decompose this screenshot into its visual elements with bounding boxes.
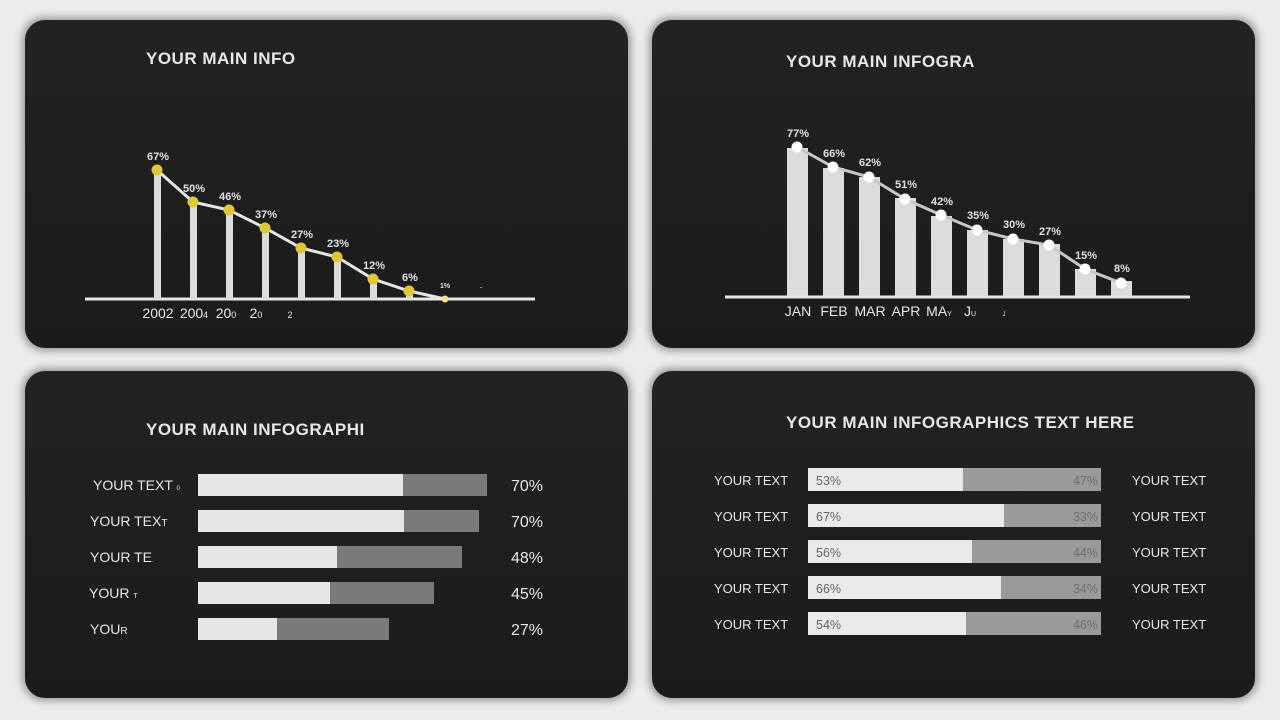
stem chart: 2004 (180, 305, 208, 321)
bar chart: J (1002, 312, 1006, 318)
split bars: 34% (1073, 582, 1098, 596)
stem chart: 2 (287, 310, 293, 320)
title: YOUR MAIN INFOGRAPHICS TEXT HERE (786, 413, 1134, 432)
bars: YOUR TE. (90, 549, 154, 565)
bars: YOUR TEXT (90, 513, 167, 529)
split bars: YOUR TEXT (1132, 473, 1206, 488)
split bars: YOUR TEXT (1132, 617, 1206, 632)
stem chart: 1% (440, 283, 451, 290)
bar chart: 66% (823, 148, 845, 160)
bar chart: FEB (820, 303, 848, 319)
split bars: 53% (816, 474, 841, 488)
bars: 27% (511, 622, 543, 639)
stem chart (85, 151, 535, 321)
bar chart: 77% (787, 128, 809, 140)
stem chart: 67% (147, 151, 169, 163)
split bars: YOUR TEXT (714, 545, 788, 560)
bar chart: 62% (859, 157, 881, 169)
bars: YOUR (90, 621, 128, 637)
bars (89, 474, 543, 640)
stem chart: 6% (402, 272, 418, 284)
panel: bottom-left horizontal bars (25, 371, 628, 698)
bar chart: APR (892, 303, 920, 319)
bars: 70% (511, 478, 543, 495)
split bars: YOUR TEXT (714, 509, 788, 524)
title: YOUR MAIN INFO (146, 49, 296, 68)
split bars: 44% (1073, 546, 1098, 560)
stem chart: 46% (219, 191, 241, 203)
split bars: YOUR TEXT (1132, 545, 1206, 560)
stem chart: 20 (250, 305, 262, 321)
bar chart: 30% (1003, 219, 1025, 231)
bar chart: 35% (967, 210, 989, 222)
bars: 70% (511, 514, 543, 531)
title: YOUR MAIN INFOGRAPHI (146, 420, 365, 439)
split bars: 33% (1073, 510, 1098, 524)
split bars: 56% (816, 546, 841, 560)
bar chart (725, 128, 1190, 319)
split bars: 54% (816, 618, 841, 632)
panel: top-left line stem chart (25, 20, 628, 348)
bars: YOUR T (89, 585, 138, 601)
bars: 48% (511, 550, 543, 567)
panel: bottom-right split bars (652, 371, 1255, 698)
bars: YOUR TEXT 0 (93, 477, 181, 493)
split bars: 66% (816, 582, 841, 596)
split bars: YOUR TEXT (1132, 581, 1206, 596)
stem chart: .. (480, 284, 483, 290)
bar chart: 8% (1114, 263, 1130, 275)
stem chart: 50% (183, 183, 205, 195)
split bars: YOUR TEXT (714, 473, 788, 488)
bars: 45% (511, 586, 543, 603)
stem chart: 12% (363, 260, 385, 272)
split bars: 47% (1073, 474, 1098, 488)
split bars: YOUR TEXT (714, 581, 788, 596)
bar chart: JAN (785, 303, 811, 319)
panel: top-right monthly bar chart (652, 20, 1255, 348)
split bars: YOUR TEXT (1132, 509, 1206, 524)
bar chart: 42% (931, 196, 953, 208)
bar chart: MAY (926, 303, 952, 319)
stem chart: 23% (327, 238, 349, 250)
bar chart: JU (964, 303, 976, 319)
bar chart: 27% (1039, 226, 1061, 238)
split bars: 46% (1073, 618, 1098, 632)
stem chart: 2002 (142, 305, 174, 321)
stem chart: 27% (291, 229, 313, 241)
split bars: YOUR TEXT (714, 617, 788, 632)
bar chart: 15% (1075, 250, 1097, 262)
stem chart: 37% (255, 209, 277, 221)
split bars (714, 468, 1206, 635)
title: YOUR MAIN INFOGRA (786, 52, 975, 71)
stem chart: 200 (216, 305, 236, 321)
split bars: 67% (816, 510, 841, 524)
bar chart: MAR (854, 303, 886, 319)
bar chart: 51% (895, 179, 917, 191)
